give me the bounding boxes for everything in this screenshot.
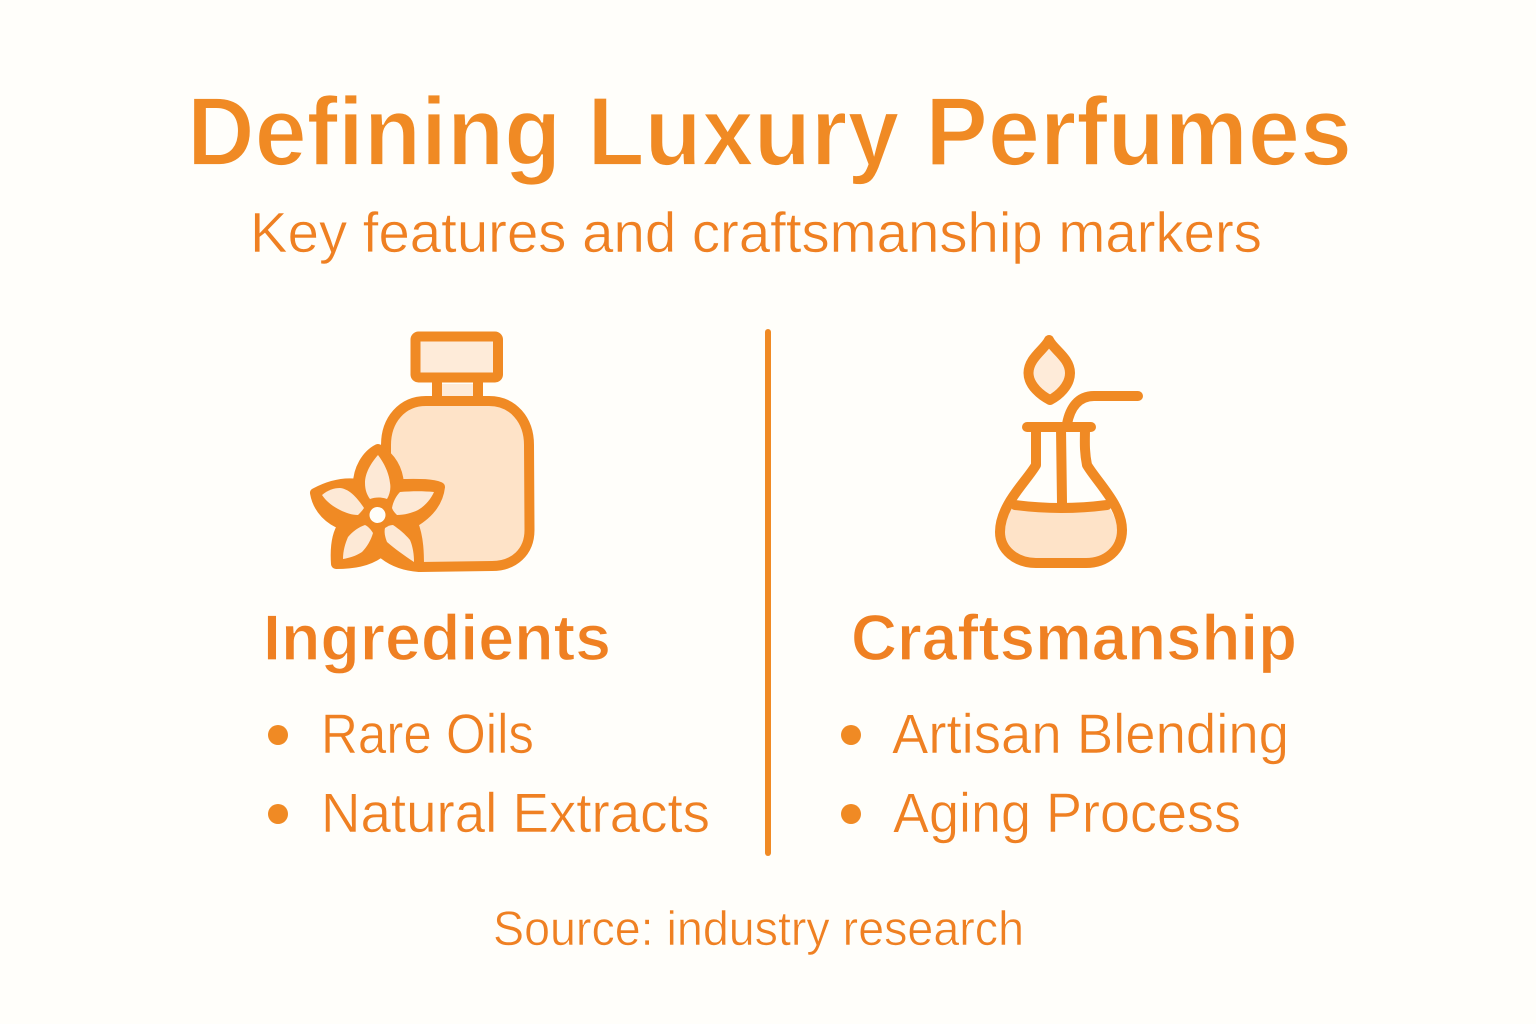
- bullet: [841, 804, 861, 824]
- liquid line: [1015, 505, 1107, 508]
- petal right: [392, 491, 434, 515]
- title: Defining Luxury Perfumes: [187, 77, 1352, 186]
- flower centre: [370, 507, 386, 523]
- bullet: [268, 804, 288, 824]
- flower: [315, 449, 440, 567]
- flame: [1028, 340, 1070, 400]
- subtitle: Key features and craftsmanship markers: [250, 201, 1262, 265]
- item: natural extracts: Natural Extracts: [321, 781, 710, 844]
- divider: [765, 329, 771, 856]
- icon: perfume bottle with flower: [315, 336, 530, 567]
- petal lower right: [385, 525, 414, 562]
- bullet: [268, 725, 288, 745]
- icon: distillation flask with flame: [1000, 340, 1138, 563]
- item: aging process: Aging Process: [893, 781, 1241, 844]
- petal top: [365, 455, 390, 499]
- tube: [1067, 396, 1138, 424]
- item: artisan blending: Artisan Blending: [892, 702, 1289, 765]
- petal left: [322, 488, 364, 515]
- bullet: [841, 725, 861, 745]
- item: rare oils: Rare Oils: [321, 702, 534, 765]
- list: ingredients: [268, 702, 710, 844]
- source note: Source: industry research: [493, 903, 1024, 956]
- flask outline: [1000, 427, 1122, 563]
- bottle body: [386, 401, 530, 567]
- bottle cap: [416, 336, 498, 378]
- petal lower left: [343, 525, 373, 559]
- bottle neck: [437, 380, 478, 400]
- inner tube: [1061, 428, 1062, 503]
- flower silhouette: [315, 449, 440, 567]
- flask liquid: [1004, 506, 1117, 562]
- heading: ingredients: Ingredients: [263, 601, 611, 674]
- heading: craftsmanship: Craftsmanship: [851, 601, 1297, 674]
- list: craftsmanship: [841, 702, 1289, 844]
- flask lip: [1027, 422, 1091, 432]
